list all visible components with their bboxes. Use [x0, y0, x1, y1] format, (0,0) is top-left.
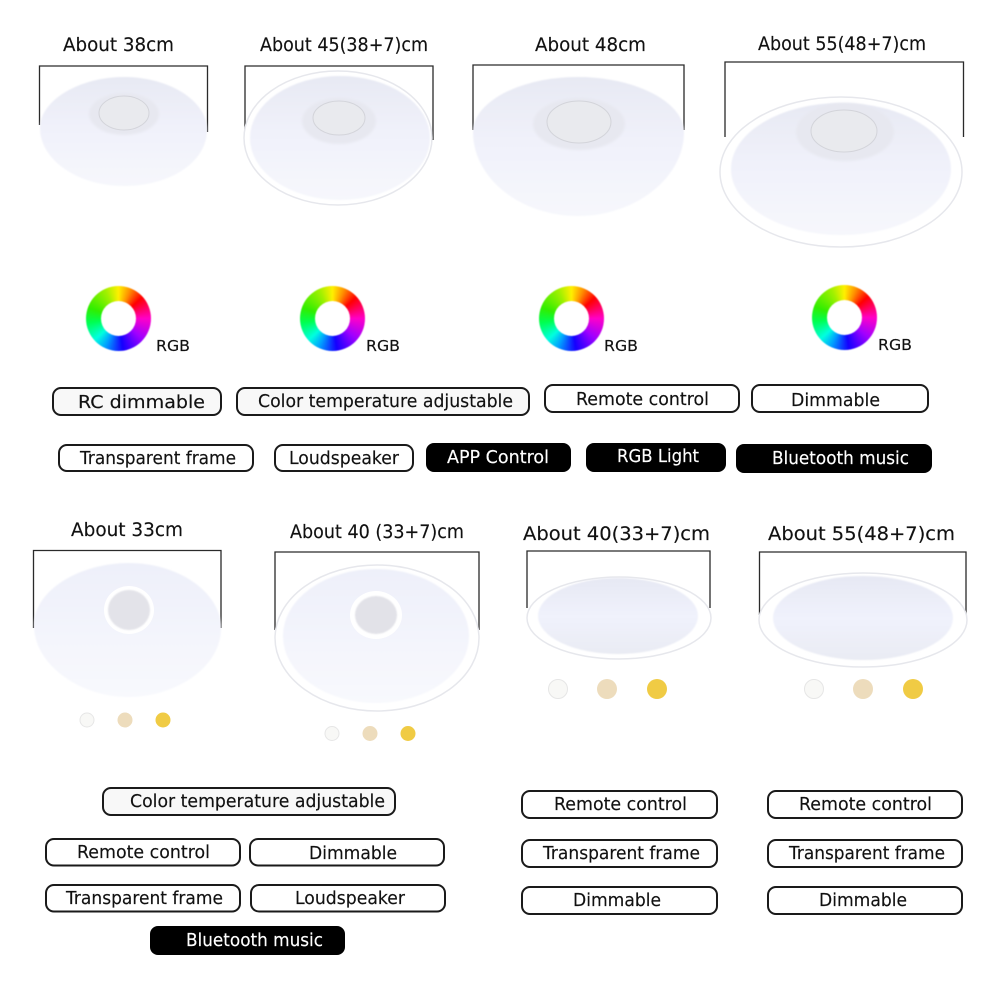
feature tags: lower middle column	[522, 791, 717, 914]
RGB labels: RGB	[156, 337, 190, 355]
lamp: about 33cm	[34, 519, 221, 697]
lamp: about 40 (33+7)cm	[275, 521, 479, 711]
lamp: about 40(33+7)cm flat	[523, 523, 711, 659]
lamp: about 55(48+7)cm: About 55(48+7)cm	[758, 33, 926, 55]
lamp: about 48cm: About 48cm	[535, 34, 646, 56]
feature tags: lower left group: Bluetooth music	[186, 930, 323, 951]
lamp: about 40 (33+7)cm: About 40 (33+7)cm	[290, 521, 464, 543]
colour temperature swatches	[80, 679, 923, 741]
lamp: about 55(48+7)cm flat: About 55(48+7)cm	[768, 523, 955, 545]
RGB labels: RGB	[366, 337, 400, 355]
feature tags: lower left group	[46, 788, 445, 955]
feature tags: upper group: RC dimmable	[78, 392, 205, 413]
feature tags: lower right column: Remote control	[799, 794, 932, 815]
feature tags: lower right column: Transparent frame	[788, 843, 945, 864]
lamp: about 45(38+7)cm	[244, 34, 433, 205]
feature tags: upper group: RGB Light	[617, 446, 699, 467]
feature tags: upper group: Bluetooth music	[772, 448, 909, 469]
lamp: about 48cm	[473, 34, 684, 216]
feature tags: lower right column: Dimmable	[819, 890, 907, 911]
feature tags: upper group: Color temperature adjustable	[258, 391, 513, 412]
feature tags: lower middle column: Transparent frame	[542, 843, 700, 864]
lamp: about 45(38+7)cm: About 45(38+7)cm	[260, 34, 428, 56]
feature tags: lower left group: Transparent frame	[65, 888, 223, 909]
feature tags: upper group: Loudspeaker	[289, 448, 400, 469]
feature tags: upper group: Remote control	[576, 389, 709, 410]
feature tags: lower middle column: Dimmable	[573, 890, 661, 911]
RGB labels: RGB	[604, 337, 638, 355]
feature tags: lower right column	[768, 791, 962, 914]
feature tags: lower left group: Dimmable	[309, 843, 397, 864]
RGB labels	[156, 336, 912, 355]
feature tags: upper group: Transparent frame	[79, 448, 236, 469]
lamp: about 38cm	[40, 34, 208, 186]
feature tags: lower left group: Color temperature adjustable	[130, 791, 385, 812]
feature tags: lower left group: Loudspeaker	[295, 888, 406, 909]
lamp: about 40(33+7)cm flat: About 40(33+7)cm	[523, 523, 710, 545]
icon: RGB colour wheel 3	[539, 286, 604, 351]
feature tags: upper group: APP Control	[447, 447, 549, 468]
lamp: about 38cm: About 38cm	[63, 34, 174, 56]
RGB labels: RGB	[878, 336, 912, 354]
feature tags: upper group	[53, 385, 932, 473]
icon: RGB colour wheel 2	[300, 286, 365, 351]
feature tags: lower left group: Remote control	[77, 842, 210, 863]
lamp: about 55(48+7)cm flat	[759, 523, 967, 667]
lamp: about 55(48+7)cm	[720, 33, 964, 247]
lamp: about 33cm: About 33cm	[71, 519, 183, 541]
icon: RGB colour wheel 1	[86, 286, 151, 351]
feature tags: upper group: Dimmable	[791, 390, 880, 411]
feature tags: lower middle column: Remote control	[554, 794, 687, 815]
icon: RGB colour wheel 4	[812, 285, 877, 350]
